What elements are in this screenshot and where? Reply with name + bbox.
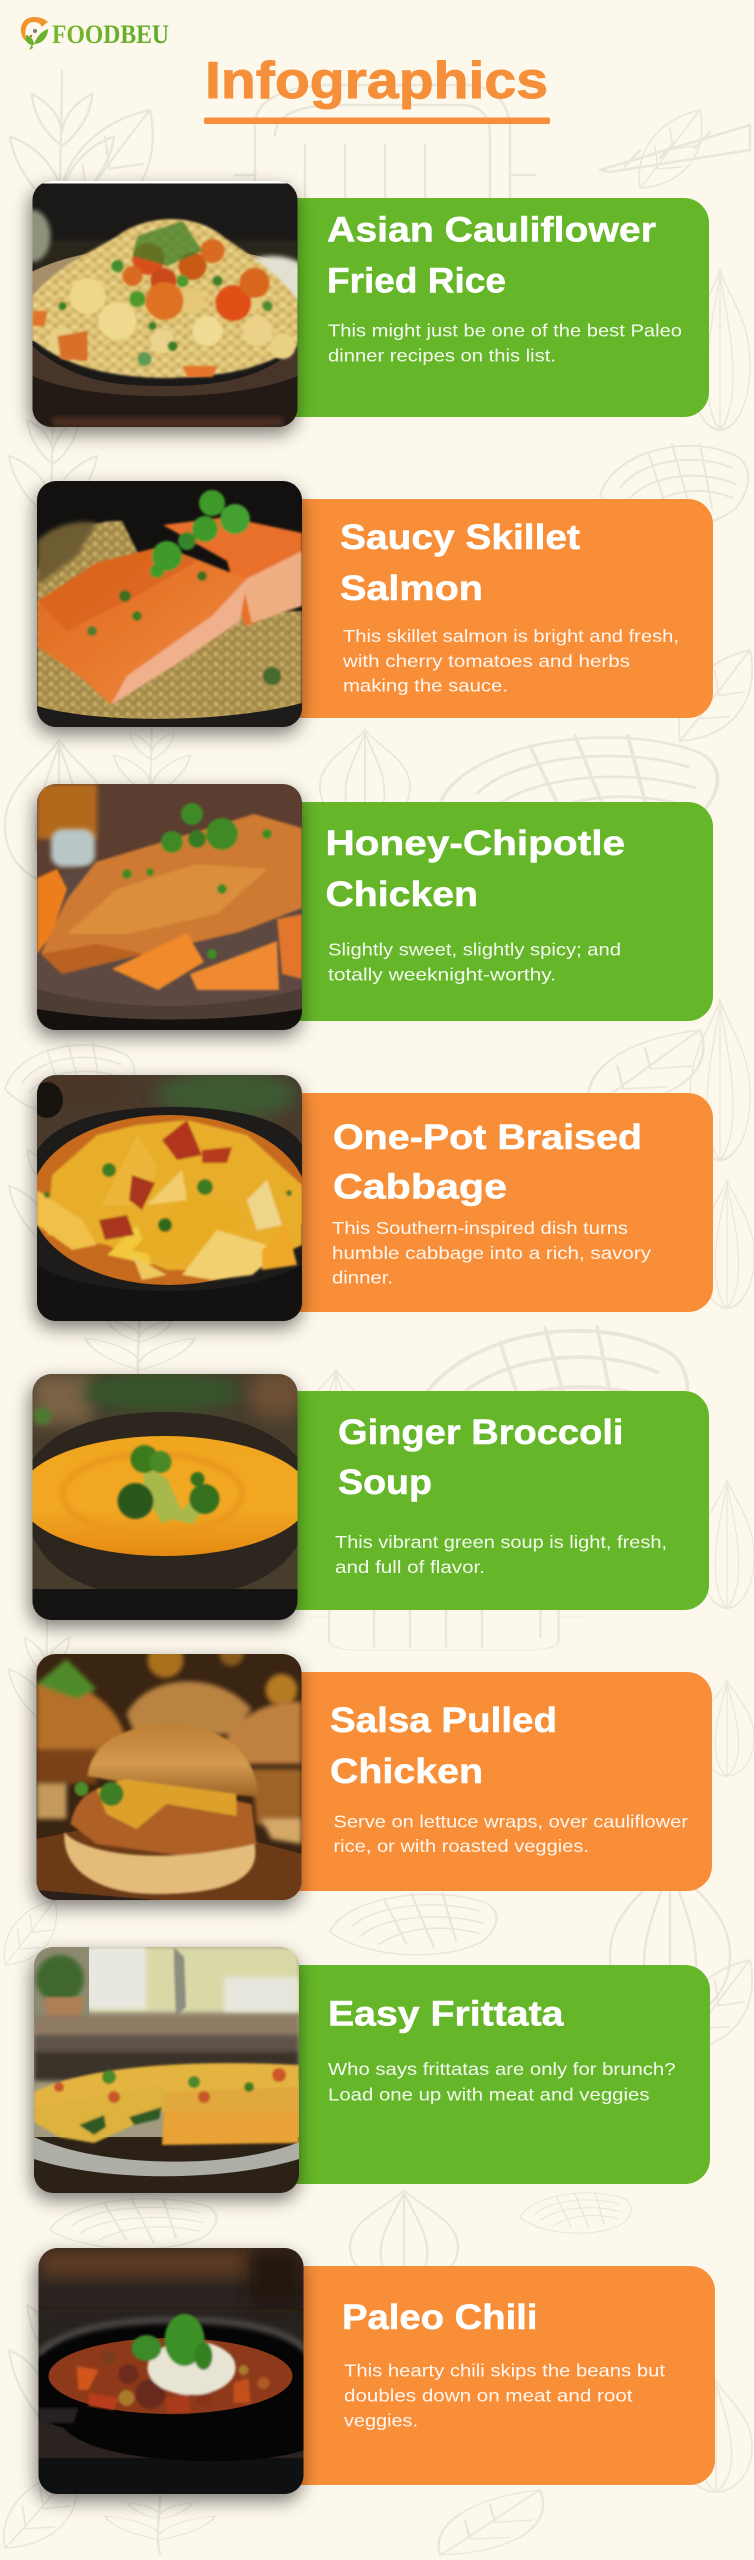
description: dinner. bbox=[332, 1268, 393, 1288]
photo shadow bbox=[35, 488, 301, 734]
description: This might just be one of the best Paleo bbox=[328, 320, 682, 340]
heading: Soup bbox=[338, 1463, 432, 1502]
title underline bbox=[204, 118, 550, 124]
logo wordmark: FOODBEU bbox=[52, 20, 169, 49]
description: making the sauce. bbox=[343, 676, 508, 696]
description: with cherry tomatoes and herbs bbox=[342, 651, 630, 671]
description bbox=[328, 320, 682, 366]
panel: Ginger Broccoli Soup bbox=[18, 1369, 709, 1627]
description: veggies. bbox=[344, 2410, 418, 2430]
card background bbox=[275, 1672, 712, 1891]
photo: salsa pulled chicken sliders bbox=[36, 1642, 302, 1900]
description: doubles down on meat and root bbox=[344, 2386, 633, 2406]
heading bbox=[327, 210, 656, 300]
description: This hearty chili skips the beans but bbox=[344, 2360, 665, 2380]
description bbox=[344, 2360, 665, 2430]
heading bbox=[333, 1118, 642, 1206]
panel: Honey-Chipotle Chicken bbox=[0, 784, 713, 1049]
photo: skillet salmon bbox=[37, 481, 302, 727]
description: This skillet salmon is bright and fresh, bbox=[343, 626, 679, 646]
card background bbox=[270, 1391, 709, 1610]
description: dinner recipes on this list. bbox=[328, 346, 556, 366]
panel: One-Pot Braised Cabbage bbox=[31, 1070, 713, 1328]
heading: Chicken bbox=[326, 875, 478, 914]
description: totally weeknight-worthy. bbox=[328, 964, 556, 984]
heading: One-Pot Braised bbox=[333, 1118, 642, 1157]
heading: Ginger Broccoli bbox=[338, 1413, 624, 1452]
panel: Saucy Skillet Salmon bbox=[35, 481, 713, 734]
panel: Salsa Pulled Chicken bbox=[34, 1642, 712, 1907]
heading: Salsa Pulled bbox=[330, 1701, 557, 1740]
photo: paleo chili bbox=[34, 2248, 308, 2494]
description bbox=[328, 940, 621, 984]
description: Serve on lettuce wraps, over cauliflower bbox=[334, 1812, 688, 1832]
card background bbox=[275, 802, 713, 1021]
description: Who says frittatas are only for brunch? bbox=[328, 2059, 676, 2079]
photo shadow bbox=[30, 1381, 296, 1627]
heading: Cabbage bbox=[333, 1168, 507, 1206]
photo: braised cabbage bbox=[31, 1070, 307, 1321]
description: rice, or with roasted veggies. bbox=[334, 1836, 589, 1856]
description bbox=[335, 1532, 667, 1577]
heading: Salmon bbox=[340, 569, 483, 608]
description bbox=[328, 2059, 676, 2104]
description: humble cabbage into a rich, savory bbox=[332, 1243, 651, 1263]
description bbox=[332, 1218, 651, 1288]
heading: Honey-Chipotle bbox=[326, 824, 625, 863]
description: This vibrant green soup is light, fresh, bbox=[335, 1532, 667, 1552]
description bbox=[334, 1812, 688, 1856]
card background bbox=[277, 2266, 715, 2485]
heading: Easy Frittata bbox=[328, 1994, 564, 2034]
description: This Southern-inspired dish turns bbox=[332, 1218, 628, 1238]
icon: orange ring with green leaves bbox=[21, 17, 48, 50]
photo: honey chipotle chicken bbox=[37, 784, 302, 1030]
photo: cauliflower fried rice bbox=[32, 181, 298, 427]
photo: ginger broccoli soup bbox=[32, 1374, 298, 1620]
heading: Chicken bbox=[330, 1752, 483, 1791]
heading: Fried Rice bbox=[327, 262, 506, 300]
card background bbox=[272, 1965, 710, 2184]
card background bbox=[275, 1093, 713, 1312]
panel: Easy Frittata bbox=[32, 1947, 710, 2200]
logo: Foodbeu bbox=[21, 17, 169, 50]
heading: Asian Cauliflower bbox=[327, 210, 656, 250]
heading bbox=[340, 518, 580, 608]
photo shadow bbox=[34, 1661, 300, 1907]
heading: Saucy Skillet bbox=[340, 518, 580, 557]
title: Infographics bbox=[205, 52, 548, 110]
photo: easy frittata bbox=[34, 1947, 299, 2193]
heading bbox=[326, 824, 625, 914]
heading: Paleo Chili bbox=[342, 2298, 538, 2337]
photo shadow bbox=[36, 2255, 302, 2501]
heading bbox=[330, 1701, 557, 1791]
description bbox=[342, 626, 679, 696]
photo shadow bbox=[32, 1954, 298, 2200]
description: and full of flavor. bbox=[335, 1557, 485, 1577]
photo shadow bbox=[35, 791, 301, 1037]
panel: Paleo Chili bbox=[34, 2248, 715, 2501]
panel: Asian Cauliflower Fried Rice bbox=[2, 181, 709, 434]
card background bbox=[275, 499, 713, 718]
photo shadow bbox=[35, 1082, 301, 1328]
card background bbox=[270, 198, 709, 417]
heading bbox=[338, 1413, 624, 1502]
description: Slightly sweet, slightly spicy; and bbox=[328, 940, 621, 960]
photo shadow bbox=[30, 188, 296, 434]
description: Load one up with meat and veggies bbox=[328, 2084, 650, 2104]
